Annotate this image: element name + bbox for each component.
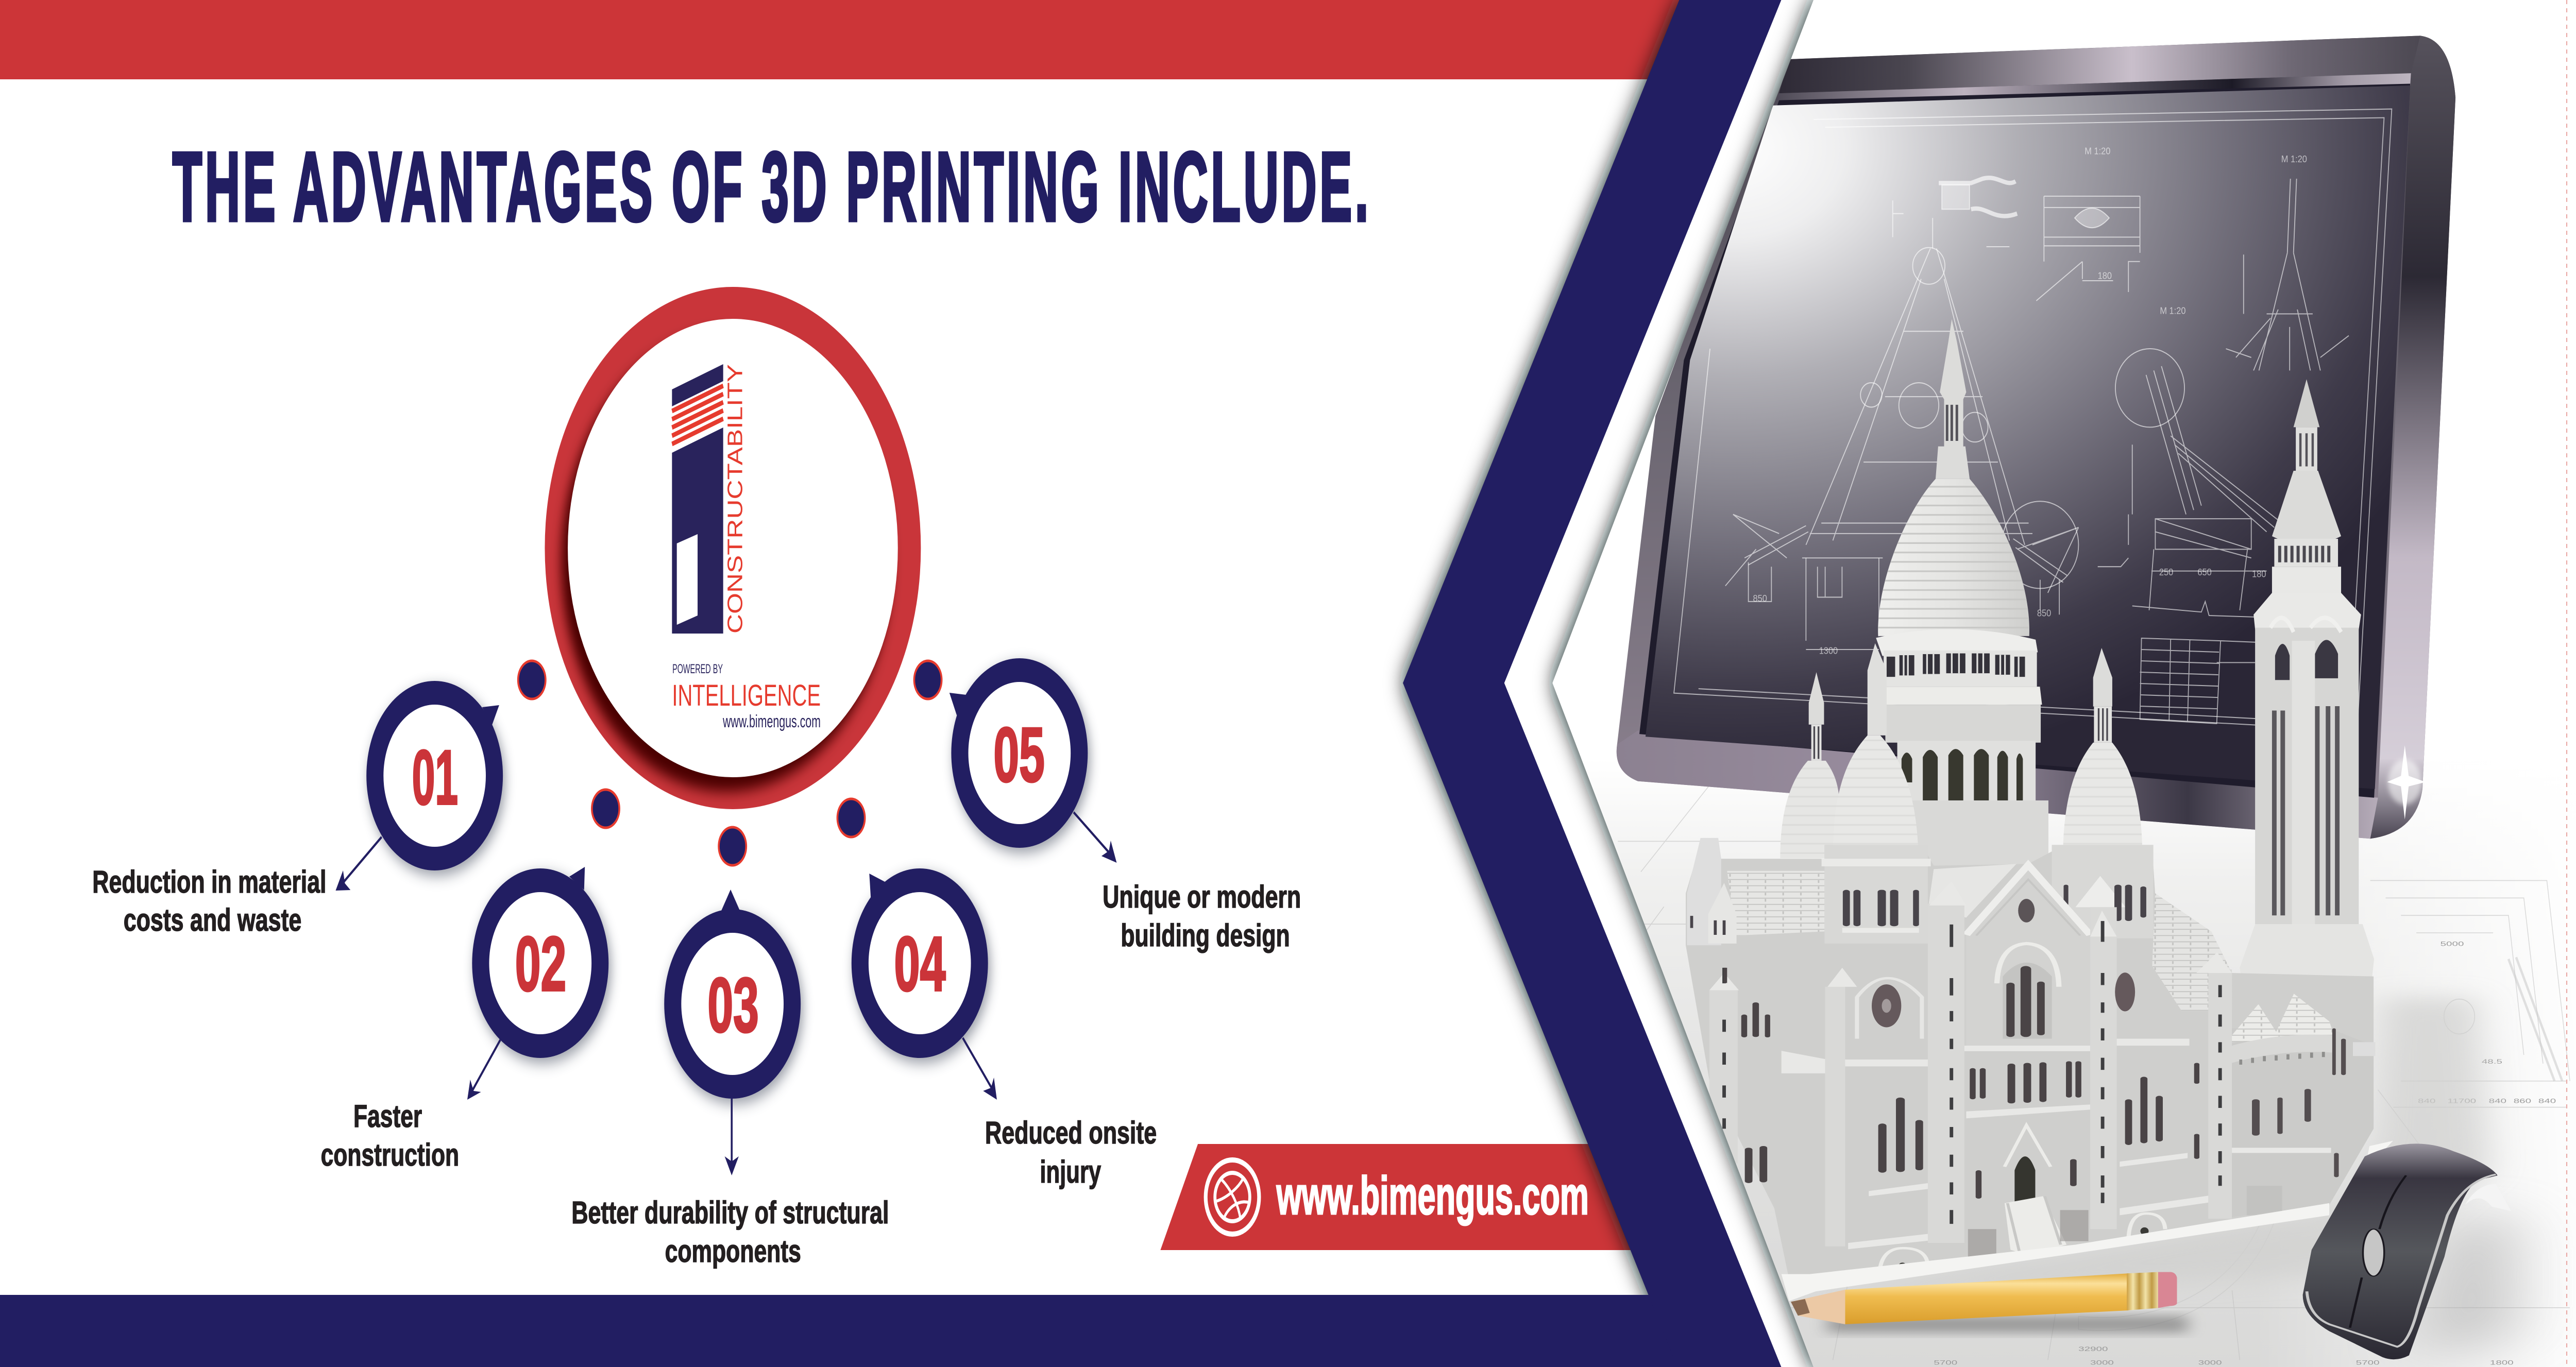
number 01: 01 xyxy=(412,734,458,821)
label 04 xyxy=(985,1116,1157,1190)
arrow 01 xyxy=(335,837,382,891)
cornices xyxy=(1782,1039,2229,1249)
red ring xyxy=(545,287,921,809)
rose windows xyxy=(1857,972,2135,1039)
right edge dashed guide xyxy=(2566,0,2568,1367)
desk labels: 48.5 xyxy=(2482,1058,2502,1065)
far tower block xyxy=(2052,845,2154,938)
label 05 xyxy=(1103,880,1301,953)
label 05: building design xyxy=(1121,918,1290,953)
far left dome xyxy=(1780,672,1840,858)
blueprint scale labels: 180 xyxy=(2098,270,2112,281)
label 02: construction xyxy=(321,1138,459,1173)
label 02: Faster xyxy=(353,1099,422,1134)
arrow 02 xyxy=(467,1040,500,1100)
website text: www.bimengus.com xyxy=(1276,1166,1589,1226)
ring inner shadow xyxy=(561,333,891,792)
number 03: 03 xyxy=(707,962,759,1048)
step 01 xyxy=(92,681,505,938)
main dome xyxy=(1872,319,2048,876)
monitor dark inner strip xyxy=(1639,83,2410,798)
centre logo circle xyxy=(545,287,921,809)
label 03: components xyxy=(665,1234,801,1269)
monitor screen xyxy=(1646,86,2410,789)
icon: dribbble ball xyxy=(1206,1160,1259,1234)
monitor xyxy=(1617,36,2455,839)
window slits xyxy=(1724,921,2220,1224)
sparkle on monitor corner xyxy=(2387,745,2426,819)
blueprint scale labels: 1300 xyxy=(1819,645,1838,656)
desk labels xyxy=(1934,941,2556,1366)
blueprint scale labels xyxy=(1753,146,2307,656)
POWERED BY: POWERED BY xyxy=(672,661,723,676)
INTELLIGENCE: INTELLIGENCE xyxy=(672,678,821,712)
logo url: www.bimengus.com xyxy=(722,712,821,731)
number 04: 04 xyxy=(894,921,946,1007)
blueprint scale labels: 250 xyxy=(2159,567,2173,577)
tower of the church model xyxy=(2240,379,2374,994)
desk labels: 840 xyxy=(2489,1098,2506,1104)
blueprint scale labels: M 1:20 xyxy=(2281,153,2307,164)
label 05: Unique or modern xyxy=(1103,880,1301,915)
left turret xyxy=(1687,838,1737,945)
pencil xyxy=(1791,1272,2188,1333)
label 01 xyxy=(92,865,326,938)
label 01: Reduction in material xyxy=(92,865,326,900)
blueprint scale labels: 650 xyxy=(2197,567,2212,577)
buttresses xyxy=(1709,904,2232,1246)
CONSTRUCTABILITY wordmark: CONSTRUCTABILITY xyxy=(724,364,747,634)
bottom navy bar xyxy=(0,1295,1743,1367)
label 03 xyxy=(571,1195,889,1269)
right roof and turret xyxy=(2152,893,2232,1011)
monitor top bezel xyxy=(1779,36,2420,93)
model base and shadow xyxy=(1798,997,2489,1298)
apse xyxy=(2232,994,2376,1217)
title: THE ADVANTAGES OF 3D PRINTING INCLUDE. xyxy=(173,132,1371,242)
church windows xyxy=(1723,968,2199,1199)
desk labels: 860 xyxy=(2514,1098,2531,1104)
navy chevron xyxy=(1403,0,1781,1367)
door and steps xyxy=(1879,1125,2165,1272)
desk labels: 5000 xyxy=(2441,941,2464,947)
right dome xyxy=(2063,648,2142,876)
blueprint scale labels: 850 xyxy=(1753,593,1767,604)
chevron shadow xyxy=(1403,0,1781,1367)
picture panel: monitor, church model, pencil, mouse xyxy=(1520,0,2576,1367)
desk labels: 840 xyxy=(2418,1098,2435,1104)
left nave roof xyxy=(1727,871,1824,935)
number 05: 05 xyxy=(993,712,1045,798)
arrow 05 xyxy=(1074,812,1116,863)
step 02 xyxy=(321,867,611,1173)
desk labels: 3000 xyxy=(2090,1359,2114,1366)
church domes xyxy=(1780,319,2142,876)
label 02 xyxy=(321,1099,459,1173)
navy chevron edge restored xyxy=(1403,0,1781,1367)
arrow 04 xyxy=(963,1038,997,1100)
monitor right frame xyxy=(2363,36,2455,839)
white disc xyxy=(568,319,898,777)
buttress caps xyxy=(1709,881,2232,990)
church facade xyxy=(1686,838,2376,1301)
label 04: Reduced onsite xyxy=(985,1116,1157,1151)
building logo mark xyxy=(672,364,723,634)
computer mouse xyxy=(2303,1141,2512,1359)
desk labels: 11700 xyxy=(2447,1098,2476,1104)
number 02: 02 xyxy=(515,921,566,1007)
arrow 03 xyxy=(725,1099,739,1175)
desk labels: 3000 xyxy=(2198,1359,2222,1366)
lower scene xyxy=(1686,838,2556,1366)
desk labels: 5700 xyxy=(2356,1359,2380,1366)
white band and picture ground xyxy=(1504,0,2576,1367)
step 05 xyxy=(950,658,1301,953)
blueprint scale labels: M 1:20 xyxy=(2084,146,2111,157)
label 04: injury xyxy=(1040,1155,1101,1190)
top red bar xyxy=(0,0,1691,79)
paper base xyxy=(1782,1203,2329,1301)
central gable xyxy=(1966,865,2090,1049)
website banner xyxy=(1160,1144,1647,1250)
monitor frame xyxy=(1617,36,2455,839)
monitor bottom frame xyxy=(1617,730,2378,839)
step 03 xyxy=(571,890,889,1269)
nave roof centre xyxy=(1928,864,2016,917)
picture panel shadow xyxy=(1552,0,2576,1367)
desk labels: 32900 xyxy=(2078,1345,2108,1353)
left tower block xyxy=(1822,845,1931,944)
label 03: Better durability of structural xyxy=(571,1195,889,1231)
desk labels: 1800 xyxy=(2490,1359,2514,1366)
label 01: costs and waste xyxy=(124,903,301,938)
blueprint scale labels: 180 xyxy=(2252,569,2266,579)
blueprint scale labels: M 1:20 xyxy=(2160,305,2186,316)
desk surface with blueprint xyxy=(1526,759,2576,1367)
blueprint on screen xyxy=(1674,109,2392,730)
front left dome xyxy=(1833,736,1919,876)
step 04 xyxy=(852,868,1157,1190)
desk labels: 840 xyxy=(2538,1098,2556,1104)
dome spire left xyxy=(1868,643,1887,736)
blueprint scale labels: 850 xyxy=(2037,608,2051,619)
desk labels: 5700 xyxy=(1934,1359,1957,1366)
connector dots xyxy=(518,661,942,865)
